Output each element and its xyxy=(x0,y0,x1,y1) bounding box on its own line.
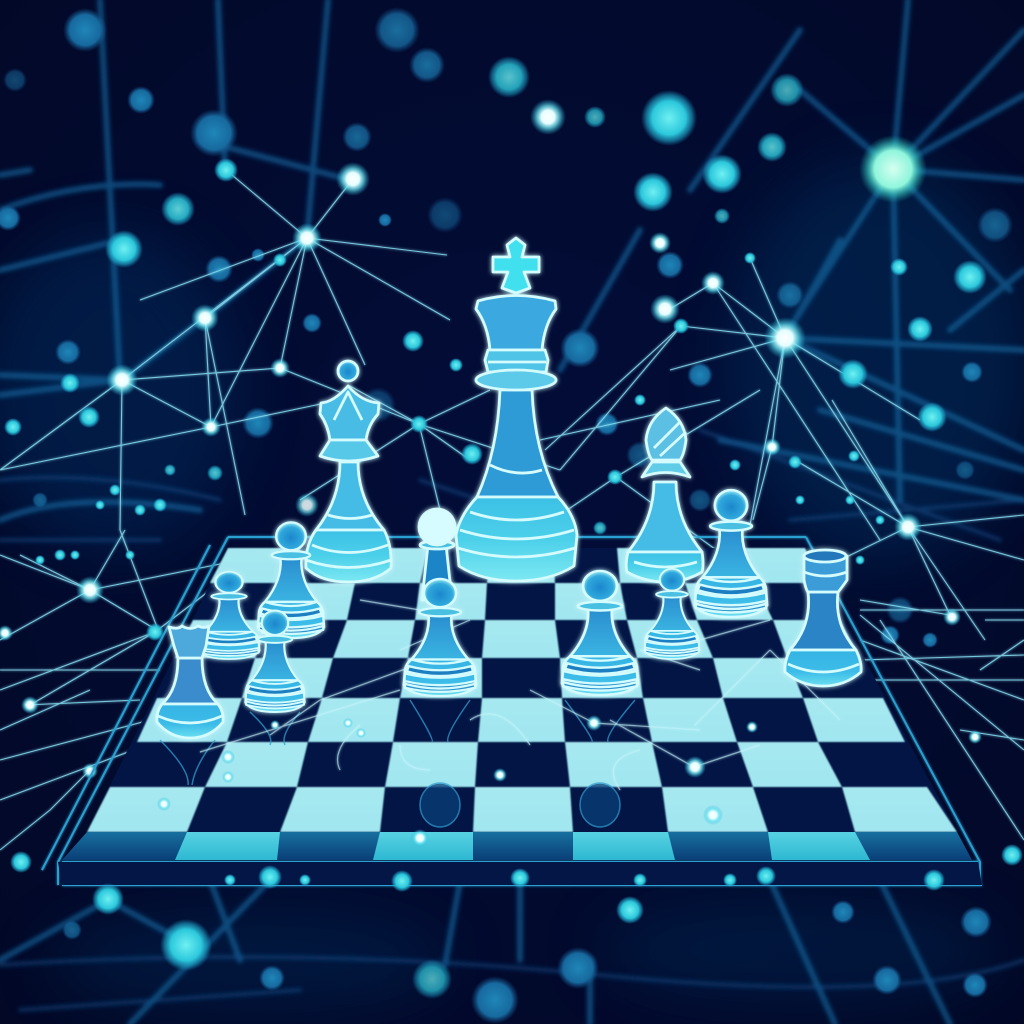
back pawn xyxy=(419,509,455,600)
pawn far left xyxy=(199,572,259,659)
piece reflections on board xyxy=(160,700,635,827)
board light squares xyxy=(87,548,957,832)
pawn left back xyxy=(258,522,324,638)
pawn centre right xyxy=(562,571,638,695)
bishop xyxy=(626,408,703,582)
board front edge light cells xyxy=(175,832,870,860)
rook right xyxy=(785,550,861,686)
thin network lines upper xyxy=(0,175,1024,850)
board sparkles xyxy=(157,715,758,847)
pawn right small xyxy=(645,569,699,659)
king xyxy=(456,238,577,581)
lower foreground nodes xyxy=(10,844,1023,999)
chess pieces xyxy=(157,238,861,738)
chess board xyxy=(42,537,982,885)
board surface xyxy=(87,548,957,832)
pawn centre xyxy=(404,579,476,696)
board front edge xyxy=(62,832,972,860)
pawn left front xyxy=(245,610,305,712)
board front band xyxy=(58,862,982,885)
thin network lines on board xyxy=(200,600,840,790)
queen xyxy=(306,361,391,582)
pawn right tall xyxy=(695,490,767,617)
rook left xyxy=(157,626,223,738)
upper network nodes xyxy=(0,56,987,779)
board frame xyxy=(42,537,982,885)
